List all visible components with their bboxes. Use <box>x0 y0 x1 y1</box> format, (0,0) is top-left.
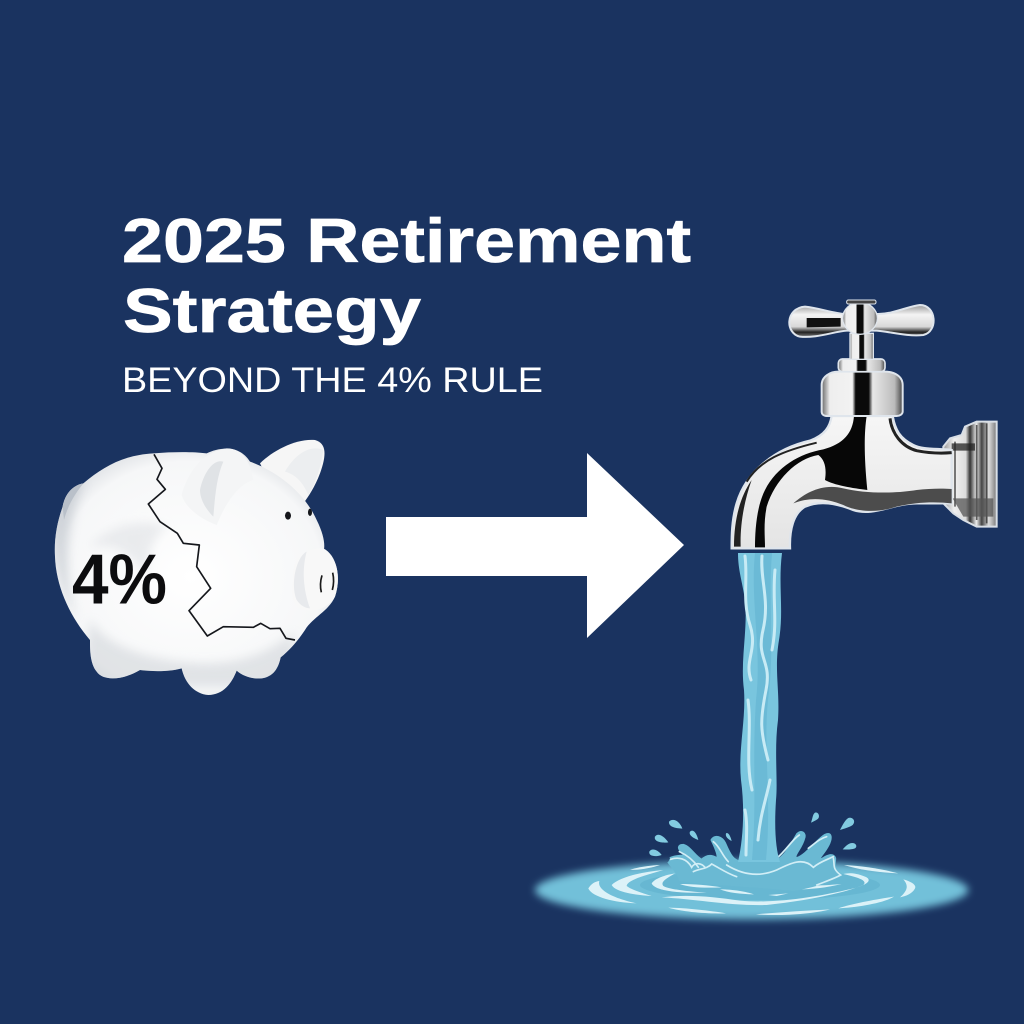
pig label 4%: 4% <box>72 540 167 619</box>
pool darker rings <box>640 870 880 900</box>
flange <box>943 422 997 527</box>
snout shade <box>294 552 310 608</box>
infographic canvas <box>54 216 998 926</box>
pig near ear <box>182 448 253 525</box>
crack <box>148 454 295 640</box>
eyes <box>285 509 312 520</box>
nostrils <box>320 573 334 592</box>
ripple highlights <box>588 865 915 915</box>
stream and spout water <box>738 553 782 862</box>
pig body <box>55 449 338 695</box>
pig underside <box>143 653 280 673</box>
spout inner edges <box>734 480 752 547</box>
stream dark band <box>752 553 772 860</box>
pig far ear <box>260 440 325 503</box>
title: Strategy <box>123 277 422 346</box>
icon: cracked piggy bank <box>52 440 338 695</box>
title: 2025 Retirement <box>122 207 691 276</box>
stem <box>850 333 873 359</box>
spout dark reflections <box>755 416 867 547</box>
spout body <box>732 416 952 548</box>
ear inner shade <box>200 461 223 517</box>
spout lower shadow <box>793 487 952 511</box>
splash highlights <box>671 835 841 885</box>
snout <box>292 548 338 610</box>
pool base <box>535 861 968 919</box>
pool of water <box>535 813 968 919</box>
icon: chrome faucet <box>732 300 997 548</box>
arrow <box>386 453 684 638</box>
handle <box>789 300 934 337</box>
pig shading <box>52 480 293 687</box>
title <box>122 207 691 346</box>
far ear inner <box>285 448 323 495</box>
crown splash <box>668 832 842 890</box>
stream highlights <box>745 556 775 855</box>
tail bump <box>63 483 83 520</box>
droplets <box>649 813 856 856</box>
collar <box>838 359 885 372</box>
cap nut <box>822 372 903 416</box>
subtitle: BEYOND THE 4% RULE <box>122 361 543 400</box>
